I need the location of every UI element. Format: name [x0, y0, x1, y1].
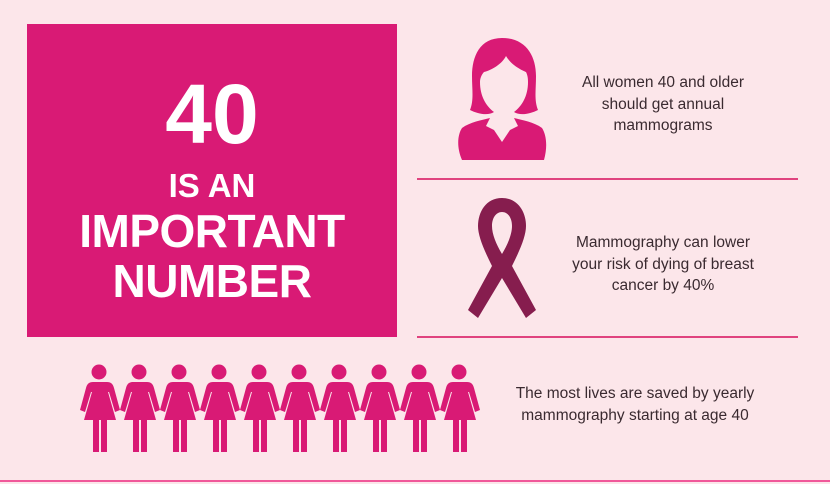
text: lives saved: The most lives are saved by yearly [516, 385, 754, 402]
heading: is an important number: NUMBER [113, 255, 311, 307]
text: annual mammograms: mammograms [613, 117, 713, 134]
text: annual mammograms: should get annual [602, 96, 724, 112]
heading: is an important number: IMPORTANT [79, 205, 345, 257]
panel: headline box [27, 24, 397, 337]
text: lower risk: cancer by 40% [612, 277, 714, 294]
text: lives saved [516, 385, 754, 424]
icon: woman [458, 38, 546, 160]
icon row: ten women [80, 364, 480, 452]
text: annual mammograms: All women 40 and older [582, 74, 744, 91]
text: lives saved: mammography starting at age 40 [521, 406, 749, 424]
heading: is an important number [79, 167, 345, 307]
icon: ribbon [468, 198, 536, 318]
text: lower risk [572, 234, 754, 294]
heading: is an important number: IS AN [169, 167, 255, 204]
text: lower risk: Mammography can lower [576, 234, 750, 251]
heading: 40: 40 [165, 67, 259, 161]
text: annual mammograms [582, 74, 744, 134]
text: lower risk: your risk of dying of breast [572, 256, 754, 272]
